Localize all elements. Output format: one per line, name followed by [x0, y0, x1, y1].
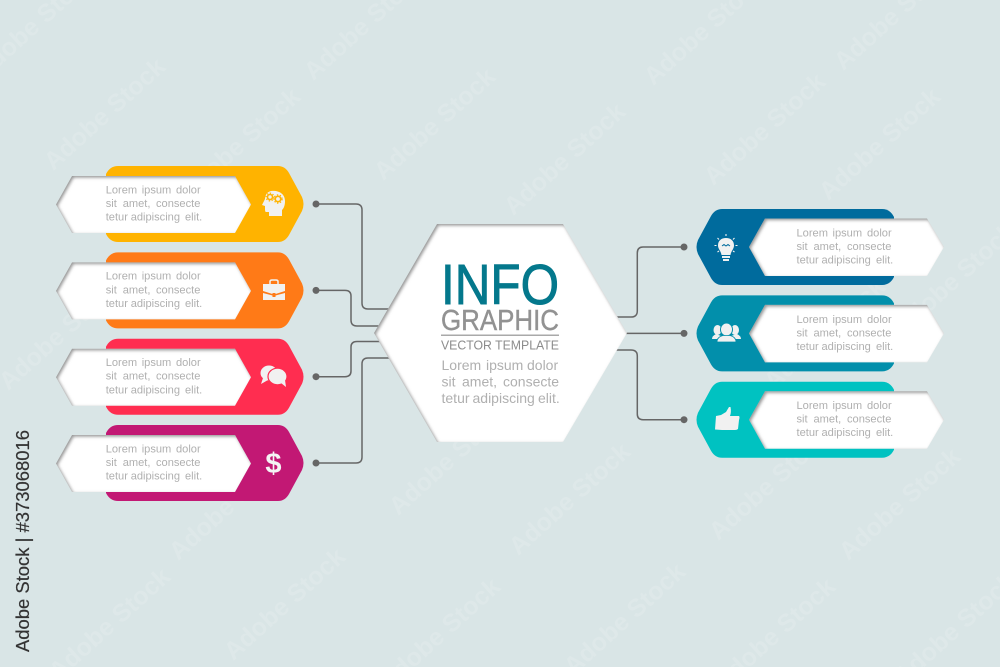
text block: elit.	[876, 341, 893, 353]
text block: amet,	[814, 241, 841, 253]
text block: Lorem	[106, 443, 137, 455]
text block: adipiscing	[131, 212, 180, 224]
text block: Lorem	[106, 184, 137, 196]
text block: sit	[796, 241, 808, 253]
connector lines left	[312, 200, 390, 466]
text block: amet,	[814, 414, 841, 426]
text block: ipsum	[142, 443, 171, 455]
central body text: adipiscing	[472, 390, 535, 406]
text block: sit	[106, 198, 117, 210]
central body text: consecte	[503, 374, 559, 390]
text block: amet,	[123, 198, 150, 210]
central body text: sit	[442, 374, 456, 390]
text block: amet,	[123, 371, 150, 383]
text block: elit.	[876, 254, 893, 266]
infographic canvas: Adobe Stock	[174, 82, 306, 206]
text block: amet,	[814, 327, 841, 339]
infographic canvas: Adobe Stock	[369, 62, 501, 186]
text block: elit.	[185, 471, 202, 483]
text block: ipsum	[832, 400, 862, 412]
text block: elit.	[876, 427, 893, 439]
icon: lightbulb	[714, 234, 738, 261]
icon: head with gears	[262, 191, 285, 216]
text block: adipiscing	[131, 384, 180, 396]
text block: tetur	[106, 471, 128, 483]
text block: Lorem	[106, 357, 137, 369]
text block: amet,	[123, 284, 150, 296]
text block: dolor	[176, 271, 201, 283]
text block: consecte	[156, 198, 200, 210]
central body text: tetur	[442, 390, 470, 406]
infographic canvas: Adobe Stock	[834, 442, 966, 566]
text block: elit.	[185, 212, 202, 224]
infographic canvas: Adobe Stock	[504, 437, 636, 561]
connector lines right	[616, 244, 688, 423]
tagline: vector template: VECTOR TEMPLATE	[441, 338, 559, 352]
text block: Lorem	[106, 271, 137, 283]
infographic canvas: Adobe Stock	[759, 272, 891, 396]
infographic canvas: Adobe Stock	[164, 442, 296, 566]
central body text: dolor	[527, 357, 558, 373]
text block: tetur	[796, 254, 819, 266]
text block: Lorem	[796, 400, 828, 412]
panel: red speech bubbles	[56, 339, 304, 415]
text block: sit	[106, 284, 117, 296]
text block: adipiscing	[822, 254, 871, 266]
stock id side text: Adobe Stock | #373068016	[13, 430, 33, 652]
text block: adipiscing	[822, 341, 871, 353]
text block: ipsum	[142, 357, 171, 369]
panel: teal people	[696, 295, 944, 371]
panel: blue lightbulb	[696, 209, 944, 285]
icon: people	[712, 323, 741, 342]
icon: briefcase	[263, 280, 285, 300]
text block: ipsum	[832, 228, 862, 240]
central hexagon panel	[374, 224, 627, 442]
text block: tetur	[106, 298, 128, 310]
text block: consecte	[156, 457, 200, 469]
infographic canvas: Adobe Stock	[699, 67, 831, 191]
title: INFO: INFO	[441, 253, 559, 317]
text block: dolor	[867, 314, 892, 326]
text block: elit.	[185, 298, 202, 310]
text block: sit	[796, 414, 808, 426]
central body text: elit.	[538, 390, 560, 406]
text block: tetur	[106, 212, 128, 224]
text block: sit	[106, 457, 117, 469]
text block: elit.	[185, 384, 202, 396]
text block: tetur	[106, 384, 128, 396]
text block: sit	[106, 371, 117, 383]
text block: consecte	[847, 414, 891, 426]
panel: yellow head	[56, 166, 304, 242]
icon: thumbs up	[715, 407, 740, 430]
panel: orange briefcase	[56, 252, 304, 328]
text block: tetur	[796, 341, 819, 353]
text block: adipiscing	[131, 298, 180, 310]
text block: consecte	[847, 327, 891, 339]
text block: consecte	[156, 371, 200, 383]
icon: dollar sign: $	[265, 448, 282, 480]
panel: magenta dollar	[56, 425, 304, 501]
text block: sit	[796, 327, 808, 339]
central body text: ipsum	[486, 357, 523, 373]
subtitle: GRAPHIC: GRAPHIC	[441, 305, 559, 337]
panel: aqua thumbs up	[696, 382, 944, 458]
infographic canvas: Adobe Stock	[814, 82, 946, 206]
text block: dolor	[867, 228, 892, 240]
text block: ipsum	[142, 271, 171, 283]
text block: consecte	[847, 241, 891, 253]
central body text: amet,	[462, 374, 497, 390]
text block: ipsum	[142, 184, 171, 196]
text block: tetur	[796, 427, 819, 439]
text block: dolor	[176, 357, 201, 369]
text block: Lorem	[796, 314, 828, 326]
divider rule	[441, 334, 559, 336]
infographic canvas: Adobe Stock	[384, 397, 516, 521]
infographic canvas: Adobe Stock	[499, 97, 631, 221]
text block: Lorem	[796, 228, 828, 240]
text block: adipiscing	[131, 471, 180, 483]
text block: dolor	[176, 443, 201, 455]
text block: ipsum	[832, 314, 862, 326]
text block: amet,	[123, 457, 150, 469]
icon: speech bubbles	[260, 366, 287, 387]
central body text: Lorem	[442, 357, 481, 373]
text block: consecte	[156, 284, 200, 296]
infographic canvas: Adobe Stock	[39, 52, 171, 176]
infographic canvas: Adobe Stock	[704, 422, 836, 546]
text block: dolor	[176, 184, 201, 196]
infographic canvas: Adobe Stock	[219, 542, 351, 666]
text block: dolor	[867, 400, 892, 412]
text block: adipiscing	[822, 427, 871, 439]
